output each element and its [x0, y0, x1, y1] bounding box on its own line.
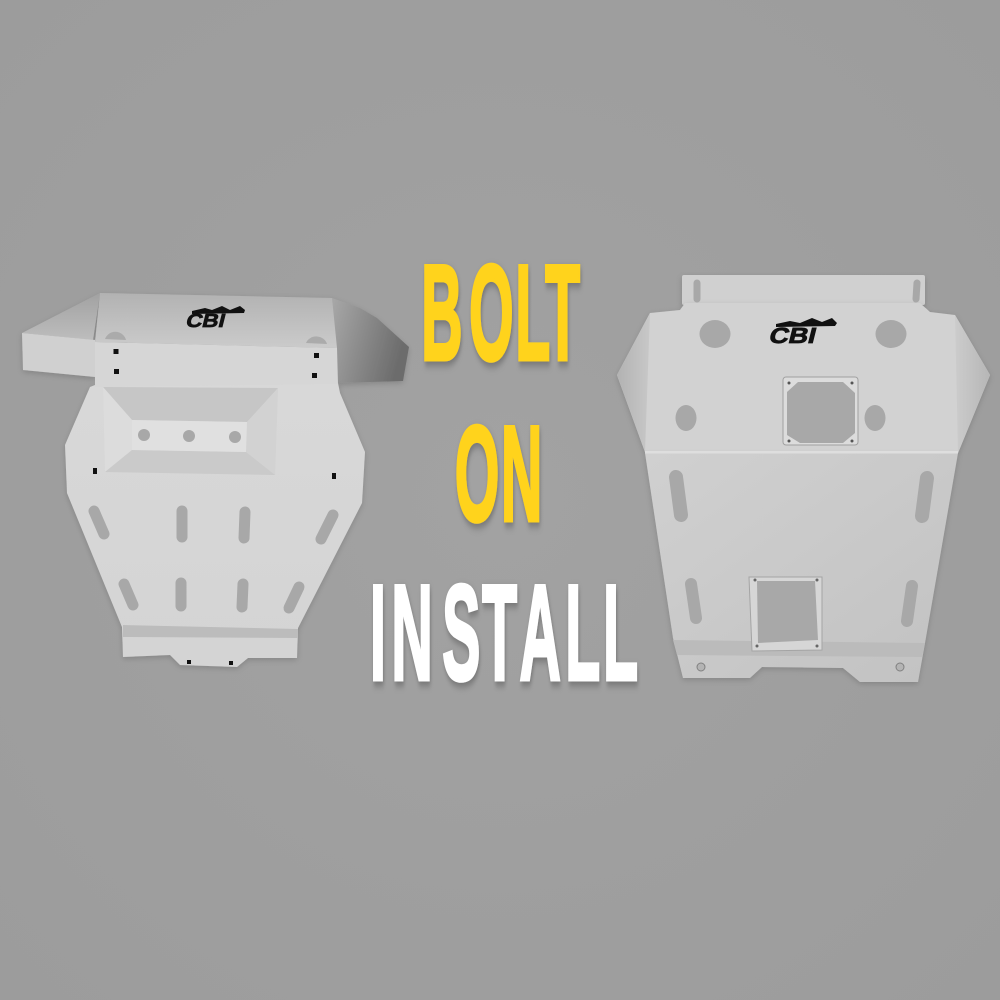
heading: BOLT: BOLT — [421, 238, 580, 389]
left plate square holes — [93, 349, 336, 665]
right plate top tab slots — [697, 283, 917, 299]
panel: right skid plate — [617, 275, 990, 682]
left plate slots — [94, 511, 333, 608]
right plate side facets — [617, 313, 990, 453]
right plate top tab — [682, 275, 925, 305]
left plate wings and bracket — [22, 293, 409, 383]
right plate slots — [676, 477, 927, 621]
right plate upper panel — [617, 303, 990, 453]
left plate main body — [65, 383, 365, 667]
left plate lower fold — [123, 625, 298, 638]
right plate lower panel — [645, 453, 958, 682]
heading: INSTALL: INSTALL — [370, 558, 638, 709]
right plate fold line — [645, 451, 958, 454]
panel: left skid plate — [22, 293, 409, 667]
right plate lower band — [673, 640, 925, 657]
right plate bolts — [697, 663, 904, 671]
left plate recess — [103, 387, 278, 475]
left plate logo: CBI — [184, 311, 228, 332]
left plate top cutouts — [105, 332, 327, 344]
right plate round holes — [676, 320, 906, 431]
right plate logo: CBI — [767, 324, 819, 348]
right plate lower access frame — [749, 577, 822, 651]
right plate upper access frame — [783, 377, 858, 445]
heading: ON: ON — [455, 399, 542, 550]
right plate logo — [767, 318, 837, 348]
left plate front band — [95, 342, 338, 387]
left plate logo — [184, 306, 245, 332]
